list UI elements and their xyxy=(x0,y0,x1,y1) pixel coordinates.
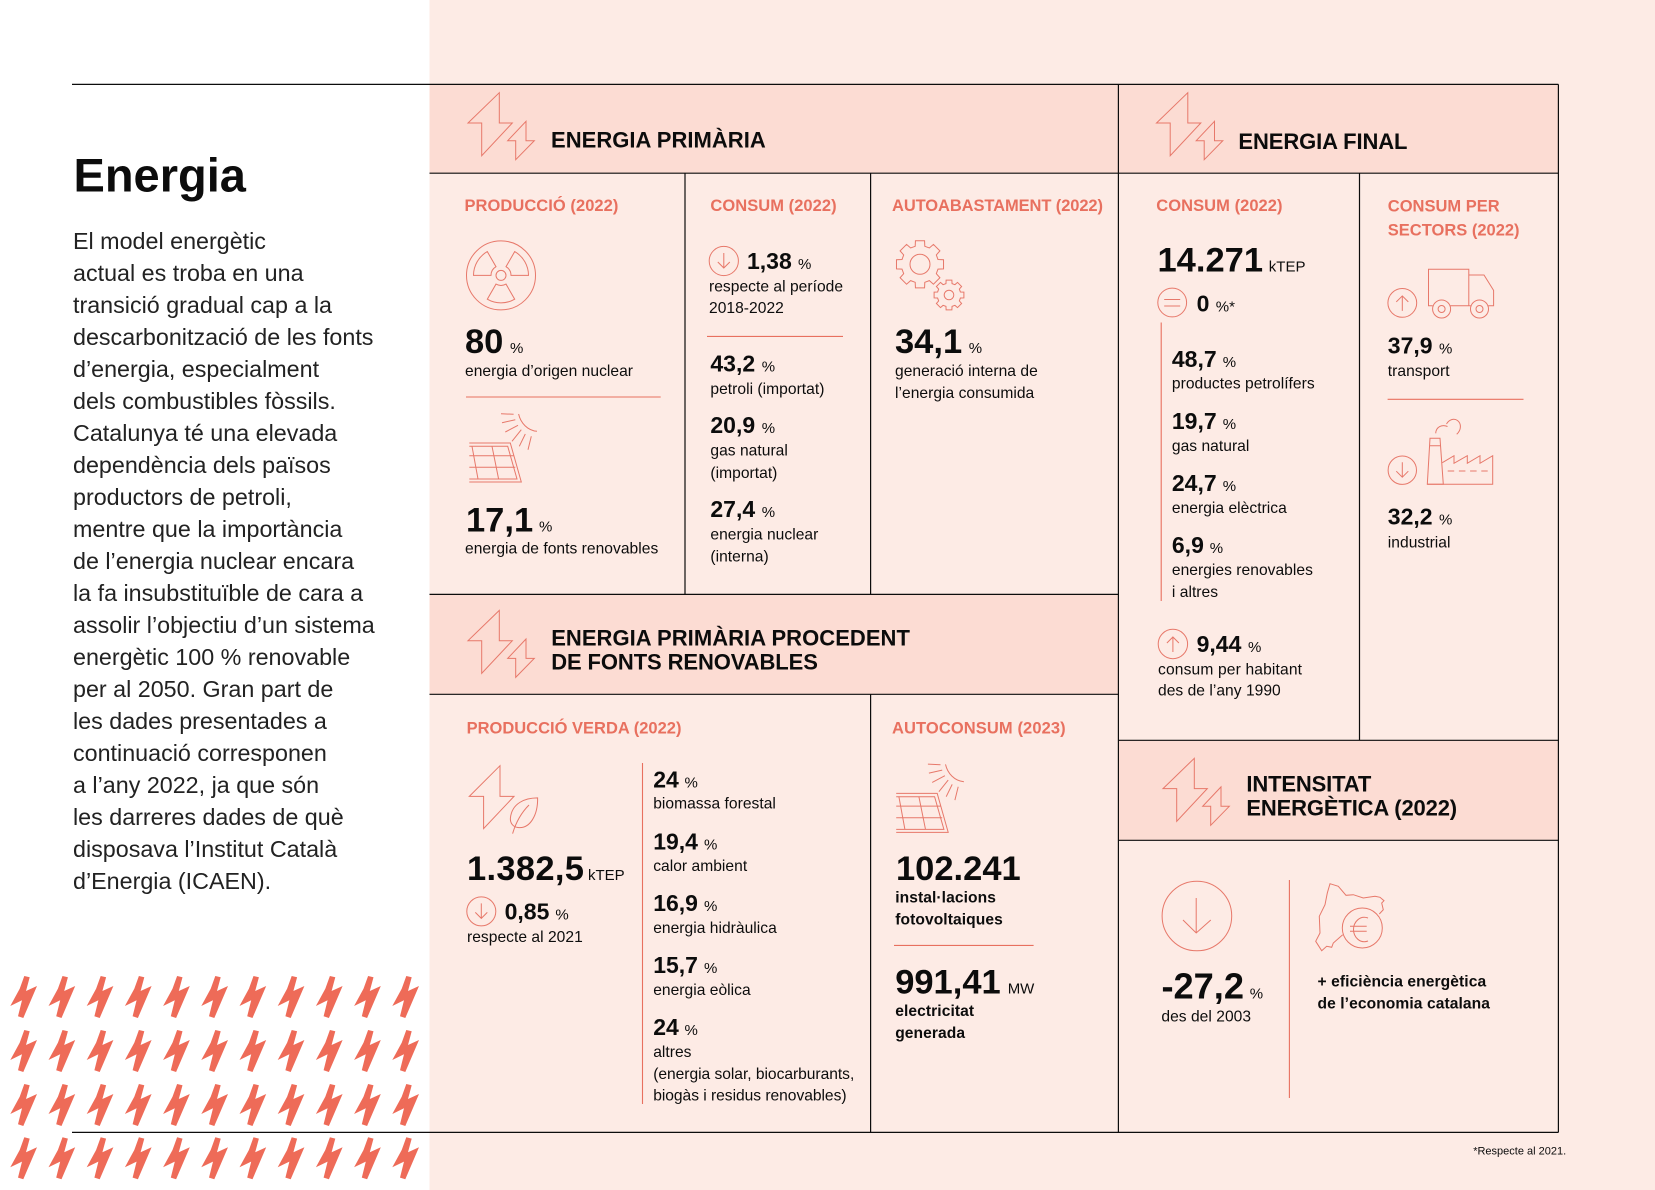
icon: up arrow xyxy=(1388,288,1417,317)
label: industrial xyxy=(1388,534,1451,552)
intro text block: d’energia, especialment xyxy=(73,356,320,382)
label: l’energia consumida xyxy=(895,385,1035,402)
stat: production: 1.382,5 xyxy=(467,850,584,888)
stat: % xyxy=(684,1022,698,1039)
stat: change: % xyxy=(555,907,569,924)
stat: 24 xyxy=(653,766,679,792)
icon: solar panel xyxy=(469,414,537,482)
label: energia nuclear xyxy=(710,527,818,544)
intro text block: continuació corresponen xyxy=(73,740,327,766)
panel heading: AUTOCONSUM (2023) xyxy=(892,720,1066,738)
label: instal·lacions xyxy=(895,890,996,906)
lightning bolt pattern xyxy=(10,976,419,1179)
stat: % xyxy=(1248,639,1261,656)
stat: 48,7 xyxy=(1172,346,1217,372)
title: Energia xyxy=(74,148,247,201)
left column: intro xyxy=(73,148,381,894)
intro text block: les dades presentades a xyxy=(73,708,327,734)
stat: installations: 102.241 xyxy=(896,850,1021,888)
label: biomassa forestal xyxy=(653,796,776,813)
stat: change: 0 xyxy=(1197,290,1209,316)
icon: large down arrow xyxy=(1162,881,1232,951)
stat: 34,1 xyxy=(895,323,962,361)
stat: -27,2 xyxy=(1162,965,1244,1006)
intro text block: Catalunya té una elevada xyxy=(73,420,337,446)
panel heading: AUTOABASTAMENT (2022) xyxy=(892,197,1103,215)
icon: gears xyxy=(896,241,964,310)
stat: total: 14.271 xyxy=(1158,241,1263,279)
footnote: *Respecte al 2021. xyxy=(1473,1145,1566,1157)
panel heading: PRODUCCIÓ (2022) xyxy=(464,196,618,215)
panel: autoconsum xyxy=(892,720,1066,1042)
stat: % xyxy=(704,836,717,853)
icon: up arrow xyxy=(1158,629,1188,659)
stat: petroli: % xyxy=(762,358,775,375)
heading: ENERGIA FINAL xyxy=(1238,129,1407,154)
intro text block: disposava l’Institut Català xyxy=(73,836,337,862)
header band fills xyxy=(430,84,1558,840)
stat: % xyxy=(704,960,717,977)
label: biogàs i residus renovables) xyxy=(653,1088,847,1105)
stat: nuclear: % xyxy=(762,504,775,521)
stat: petroli: 43,2 xyxy=(710,350,755,376)
stat: 24,7 xyxy=(1172,470,1217,496)
label: respecte al 2021 xyxy=(467,929,583,946)
stat: renewables: 17,1 xyxy=(466,501,533,539)
label: productes petrolífers xyxy=(1172,376,1315,393)
icon: radiation xyxy=(466,241,536,310)
icon: down arrow xyxy=(467,897,496,926)
stat: 15,7 xyxy=(653,952,698,978)
heading: ENERGIA PRIMÀRIA xyxy=(551,128,766,152)
intro text block: El model energètic xyxy=(73,228,266,254)
label: energia hidràulica xyxy=(653,920,777,937)
label: electricitat xyxy=(895,1003,974,1020)
intro text block: per al 2050. Gran part de xyxy=(73,676,333,702)
icon: equal xyxy=(1158,288,1187,317)
icon: double lightning bolt xyxy=(468,93,534,160)
stat: total: kTEP xyxy=(1269,258,1305,275)
heading: DE FONTS RENOVABLES xyxy=(551,649,818,674)
icon: double lightning bolt xyxy=(468,610,534,677)
stat: 1,38 xyxy=(747,248,792,274)
stat: nuclear: % xyxy=(510,340,523,357)
header: energia primària xyxy=(468,93,766,160)
intro text block: d’Energia (ICAEN). xyxy=(73,868,271,894)
stat: % xyxy=(969,340,982,357)
icon: solar panel xyxy=(896,764,964,832)
intro text block: les darreres dades de què xyxy=(73,804,344,830)
label: generada xyxy=(895,1025,965,1042)
intro text block: actual es troba en una xyxy=(73,260,304,286)
stat: power: MW xyxy=(1008,981,1035,998)
stat: change: %* xyxy=(1216,298,1235,315)
label: 2018-2022 xyxy=(709,300,784,317)
panel: autoabastament xyxy=(892,197,1103,402)
panel: intensitat xyxy=(1161,880,1490,1098)
icon: double lightning bolt xyxy=(1163,758,1229,825)
stat: % xyxy=(1210,540,1223,557)
header: energia primària renovable xyxy=(468,610,910,677)
stat: transport: % xyxy=(1439,341,1452,358)
intro text block: descarbonització de les fonts xyxy=(73,324,373,350)
stat: nuclear: 27,4 xyxy=(710,496,755,522)
stat: gas: % xyxy=(762,420,775,437)
label: des de l’any 1990 xyxy=(1158,683,1281,700)
intro text block: mentre que la importància xyxy=(73,516,342,542)
intro text block: la fa insubstituïble de cara a xyxy=(73,580,363,606)
label: des del 2003 xyxy=(1161,1009,1251,1026)
intro text block: energètic 100 % renovable xyxy=(73,644,350,670)
stat: % xyxy=(704,898,717,915)
intro text block: dependència dels països xyxy=(73,452,331,478)
stat: % xyxy=(1250,985,1263,1002)
icon: bolt and leaf xyxy=(469,766,538,834)
intro text block: assolir l’objectiu d’un sistema xyxy=(73,612,375,638)
label: respecte al període xyxy=(709,278,843,295)
icon: down arrow xyxy=(709,246,738,276)
label: (interna) xyxy=(710,548,769,565)
icon: truck xyxy=(1428,269,1494,318)
panel: producció verda xyxy=(467,719,854,1105)
stat: industrial: % xyxy=(1439,511,1452,528)
icon: factory xyxy=(1427,419,1493,484)
panel: consum primària xyxy=(707,197,843,565)
label: altres xyxy=(653,1044,692,1061)
label: calor ambient xyxy=(653,858,748,875)
stat: nuclear: 80 xyxy=(465,323,503,361)
stat: 9,44 xyxy=(1197,631,1241,657)
label: generació interna de xyxy=(895,363,1038,380)
statement: + eficiència energètica xyxy=(1318,974,1486,991)
panel heading: SECTORS (2022) xyxy=(1388,222,1520,240)
stat: transport: 37,9 xyxy=(1388,333,1433,359)
label: energia d’origen nuclear xyxy=(465,363,633,380)
label: consum per habitant xyxy=(1158,661,1303,678)
label: petroli (importat) xyxy=(710,381,824,398)
label: gas natural xyxy=(1172,438,1249,455)
icon: Catalonia map with euro coin xyxy=(1316,884,1384,951)
stat: % xyxy=(1223,354,1236,371)
stat: % xyxy=(798,256,811,273)
header: energia final xyxy=(1156,93,1407,160)
intro text block: a l’any 2022, ja que són xyxy=(73,772,319,798)
label: gas natural xyxy=(710,443,788,460)
stat: 19,7 xyxy=(1172,408,1217,434)
label: (importat) xyxy=(710,465,777,482)
stat: production: kTEP xyxy=(588,867,625,884)
header: intensitat energètica xyxy=(1163,758,1457,825)
intro text block: transició gradual cap a la xyxy=(73,292,332,318)
panel heading: PRODUCCIÓ VERDA (2022) xyxy=(467,719,681,738)
label: fotovoltaiques xyxy=(895,912,1003,929)
stat: renewables: % xyxy=(539,518,552,535)
statement: de l’economia catalana xyxy=(1318,995,1490,1012)
stat: 16,9 xyxy=(653,890,698,916)
panel: producció xyxy=(464,196,661,558)
label: energia elèctrica xyxy=(1172,500,1287,517)
intro text block: de l’energia nuclear encara xyxy=(73,548,354,574)
panel heading: CONSUM (2022) xyxy=(1156,197,1283,215)
label: energies renovables xyxy=(1172,562,1313,579)
icon: down arrow xyxy=(1388,456,1416,484)
panel: consum per sectors xyxy=(1388,198,1524,552)
heading: ENERGIA PRIMÀRIA PROCEDENT xyxy=(551,625,910,650)
stat: 6,9 xyxy=(1172,532,1204,558)
label: i altres xyxy=(1172,584,1218,601)
label: (energia solar, biocarburants, xyxy=(653,1066,854,1083)
stat: 19,4 xyxy=(653,828,698,854)
stat: gas: 20,9 xyxy=(710,412,755,438)
stat: % xyxy=(1223,416,1236,433)
stat: % xyxy=(1223,478,1236,495)
panel heading: CONSUM PER xyxy=(1388,198,1500,216)
label: transport xyxy=(1388,363,1450,380)
panel: consum final xyxy=(1156,197,1315,700)
icon: double lightning bolt xyxy=(1156,93,1223,160)
stat: change: 0,85 xyxy=(505,899,549,925)
intro text block: dels combustibles fòssils. xyxy=(73,388,336,414)
stat: 24 xyxy=(653,1014,679,1040)
heading: INTENSITAT xyxy=(1246,771,1372,796)
stat: industrial: 32,2 xyxy=(1388,503,1433,529)
stat: % xyxy=(684,774,698,792)
stat: power: 991,41 xyxy=(895,964,1001,1002)
panel heading: CONSUM (2022) xyxy=(710,197,837,215)
label: energia de fonts renovables xyxy=(465,541,658,558)
label: energia eòlica xyxy=(653,982,751,999)
intro text block: productors de petroli, xyxy=(73,484,292,510)
heading: ENERGÈTICA (2022) xyxy=(1246,796,1457,821)
